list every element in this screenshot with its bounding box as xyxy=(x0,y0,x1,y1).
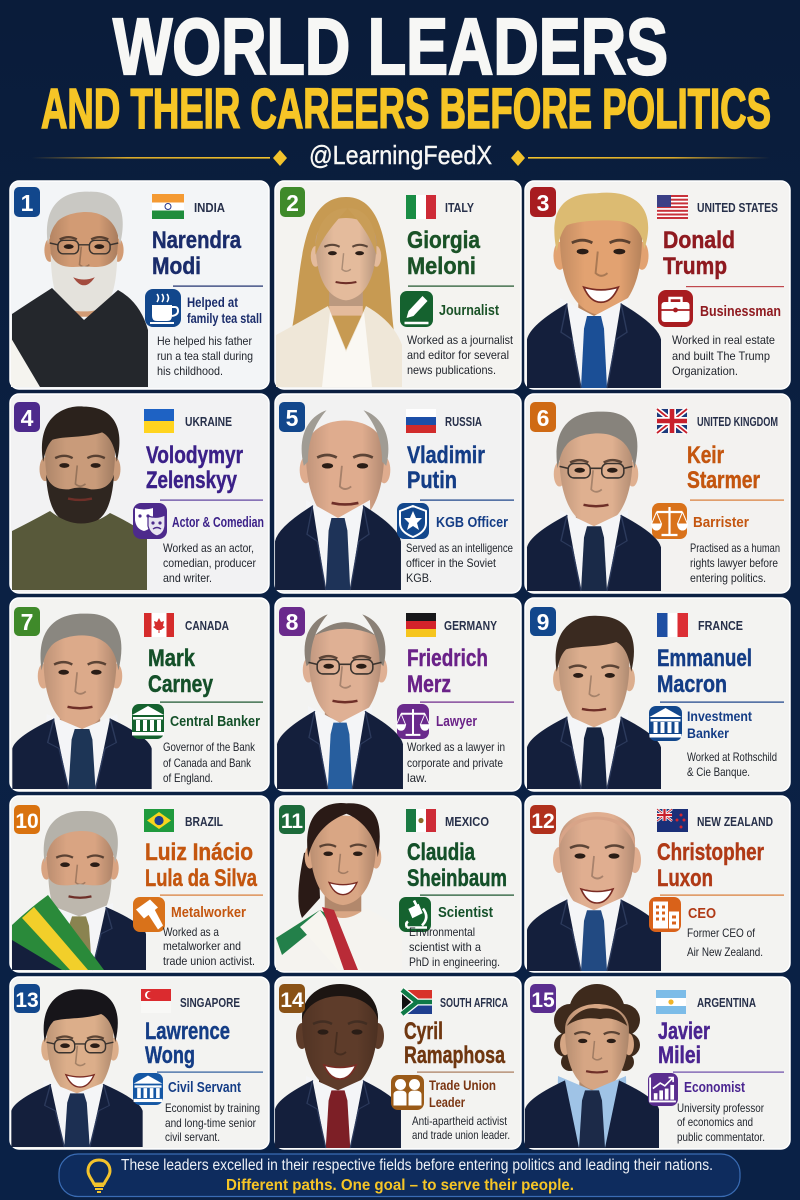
description xyxy=(677,1101,765,1144)
flag: Argentina xyxy=(656,990,686,1014)
description: Worked as a lawyer in xyxy=(407,740,505,754)
panel: 9 Emmanuel Macron xyxy=(525,598,790,791)
number badge xyxy=(14,607,40,636)
icon: chart xyxy=(648,1073,678,1106)
career: Metalworker xyxy=(171,905,246,921)
number badge: 1 xyxy=(21,190,34,216)
number badge xyxy=(14,187,40,217)
description: University professor xyxy=(677,1101,764,1115)
number badge: 10 xyxy=(15,810,39,833)
icon: scales xyxy=(396,704,430,739)
number badge: 11 xyxy=(281,810,303,833)
panel: 10 Luiz Inacio Lula da Silva xyxy=(10,796,269,972)
country: ARGENTINA xyxy=(697,996,756,1010)
name: Mark xyxy=(148,645,195,672)
country: RUSSIA xyxy=(445,415,482,429)
number badge: 2 xyxy=(286,190,299,216)
description: KGB. xyxy=(406,571,432,585)
flag: Ukraine xyxy=(144,409,174,433)
panel: 15 Javier Milei xyxy=(525,977,790,1149)
description: Economist by training xyxy=(165,1101,260,1115)
name: Lula da Silva xyxy=(145,865,257,892)
career: KGB Officer xyxy=(436,515,508,531)
panel: 5 Vladimir Putin xyxy=(275,394,521,593)
country: SOUTH AFRICA xyxy=(440,996,508,1010)
number badge xyxy=(279,607,305,636)
description: law. xyxy=(407,771,427,785)
icon: tea cup xyxy=(145,289,181,327)
number badge: 5 xyxy=(286,405,299,431)
portrait xyxy=(12,406,147,590)
name: Keir xyxy=(687,442,724,469)
panel: 4 Volodymyr Zelenskyy xyxy=(10,394,269,593)
description: Air New Zealand. xyxy=(687,945,763,959)
description: officer in the Soviet xyxy=(406,556,497,570)
country: INDIA xyxy=(194,201,225,215)
name: Wong xyxy=(145,1042,195,1069)
flag: Germany xyxy=(406,613,436,637)
description xyxy=(687,750,777,779)
description: Worked as a journalist xyxy=(407,333,514,347)
name: Sheinbaum xyxy=(407,865,507,892)
description: of England. xyxy=(163,771,213,785)
portrait xyxy=(276,197,402,387)
name: Christopher xyxy=(657,839,764,866)
number badge xyxy=(14,402,40,432)
name: Volodymyr xyxy=(146,442,243,469)
name xyxy=(663,227,735,280)
name xyxy=(658,1018,710,1069)
flag: United States xyxy=(657,195,688,219)
number badge: 15 xyxy=(531,989,555,1012)
icon: pen xyxy=(400,291,433,327)
name: Narendra xyxy=(152,227,241,254)
panel: 6 Keir Starmer xyxy=(525,394,790,593)
description: Anti-apartheid activist xyxy=(412,1114,508,1128)
name: Friedrich xyxy=(407,645,488,672)
number badge xyxy=(530,607,556,636)
portrait xyxy=(12,811,146,970)
number badge xyxy=(280,187,305,217)
footer banner xyxy=(59,1154,740,1196)
description: rights lawyer before xyxy=(690,556,778,570)
portrait xyxy=(525,984,659,1148)
name xyxy=(404,1018,505,1069)
name: Merz xyxy=(407,671,451,698)
number badge: 7 xyxy=(21,609,33,635)
name: Cyril xyxy=(404,1018,443,1045)
number badge: 3 xyxy=(537,190,549,216)
handle row xyxy=(32,140,770,170)
flag: India xyxy=(152,194,184,219)
icon: light bulb xyxy=(88,1160,110,1192)
portrait xyxy=(11,989,143,1147)
name xyxy=(407,839,507,892)
number badge: 9 xyxy=(537,609,549,635)
description: and built The Trump xyxy=(672,349,770,363)
country: UNITED STATES xyxy=(697,201,778,215)
description: metalworker and xyxy=(163,939,241,953)
description xyxy=(672,333,775,378)
number badge: 12 xyxy=(531,810,555,833)
description: corporate and private xyxy=(407,756,503,770)
description: trade union activist. xyxy=(163,954,255,968)
career: Scientist xyxy=(438,905,493,921)
footer text: These leaders excelled in their respective fields before entering politics and leading their nations. xyxy=(121,1157,713,1174)
panel: 1 Narendra Modi xyxy=(10,181,269,389)
career xyxy=(429,1077,496,1110)
country: FRANCE xyxy=(698,619,743,633)
number badge: 13 xyxy=(15,989,39,1012)
career: family tea stall xyxy=(187,310,262,326)
icon: theatre masks xyxy=(133,503,167,539)
panel: 2 Giorgia Meloni xyxy=(275,181,521,389)
name: Trump xyxy=(663,253,727,280)
description: Worked at Rothschild xyxy=(687,750,777,764)
description: Worked in real estate xyxy=(672,333,775,347)
description: of Canada and Bank xyxy=(163,756,252,770)
name: Vladimir xyxy=(407,442,485,469)
description: his childhood. xyxy=(157,364,223,378)
country: UKRAINE xyxy=(185,415,232,429)
portrait xyxy=(277,614,403,789)
career xyxy=(687,708,752,741)
number badge xyxy=(279,805,305,834)
number badge: 6 xyxy=(537,405,549,431)
name xyxy=(148,645,213,698)
career: Businessman xyxy=(700,304,781,320)
career: Banker xyxy=(687,725,729,741)
career: Central Banker xyxy=(170,714,260,730)
panel: 7 Mark Carney xyxy=(10,598,269,791)
description: public commentator. xyxy=(677,1130,765,1144)
icon: briefcase xyxy=(658,290,693,327)
career xyxy=(187,294,262,326)
flag: France xyxy=(657,613,688,637)
description xyxy=(687,926,763,959)
number badge xyxy=(530,187,556,217)
description xyxy=(163,740,256,785)
description: & Cie Banque. xyxy=(687,765,750,779)
number badge: 8 xyxy=(286,609,299,635)
career: Journalist xyxy=(439,303,499,319)
description: of economics and xyxy=(677,1115,753,1129)
name xyxy=(407,442,485,494)
career: Economist xyxy=(684,1080,745,1096)
description: Former CEO of xyxy=(687,926,756,940)
flag: New Zealand xyxy=(657,809,688,832)
description: Environmental xyxy=(409,925,475,939)
name: Meloni xyxy=(407,253,476,280)
name: Javier xyxy=(658,1018,710,1045)
name: Starmer xyxy=(687,467,760,494)
portrait xyxy=(275,410,401,590)
description: and editor for several xyxy=(407,348,509,362)
name: Ramaphosa xyxy=(404,1042,505,1069)
description xyxy=(157,334,253,378)
description: PhD in engineering. xyxy=(409,955,500,969)
flag: United Kingdom xyxy=(657,409,687,433)
flag: Mexico xyxy=(406,809,436,832)
description: news publications. xyxy=(407,363,496,377)
description xyxy=(165,1101,260,1144)
number badge xyxy=(279,402,305,432)
description: Worked as a xyxy=(163,925,219,939)
portrait xyxy=(527,616,661,789)
flag: Canada xyxy=(144,613,174,637)
name: Putin xyxy=(407,467,457,494)
panel: 11 Claudia Sheinbaum xyxy=(275,796,521,972)
description xyxy=(407,740,505,785)
description xyxy=(412,1114,510,1142)
description: scientist with a xyxy=(409,940,481,954)
portrait xyxy=(276,803,402,970)
description: and trade union leader. xyxy=(412,1128,510,1142)
description: Served as an intelligence xyxy=(406,541,513,555)
panel: 14 Cyril Ramaphosa xyxy=(275,977,521,1149)
description: run a tea stall during xyxy=(157,349,253,363)
name xyxy=(152,227,241,280)
description: comedian, producer xyxy=(163,556,256,570)
panel: 12 Christopher Luxon xyxy=(525,796,790,972)
portrait xyxy=(527,412,661,591)
description: Governor of the Bank xyxy=(163,740,256,754)
name xyxy=(145,1018,230,1069)
career: Civil Servant xyxy=(168,1080,241,1096)
flag: Italy xyxy=(406,195,436,219)
icon: building xyxy=(649,897,681,932)
portrait xyxy=(275,984,401,1148)
name xyxy=(407,645,488,698)
name xyxy=(145,839,257,892)
name: Luxon xyxy=(657,865,713,892)
country: SINGAPORE xyxy=(180,996,240,1010)
portrait xyxy=(11,192,148,387)
name: Macron xyxy=(657,671,727,698)
portrait xyxy=(12,614,152,789)
description: He helped his father xyxy=(157,334,252,348)
number badge xyxy=(530,402,556,432)
name: Milei xyxy=(658,1042,701,1069)
icon: shield xyxy=(397,503,429,539)
flag: Singapore xyxy=(141,989,171,1013)
icon: people xyxy=(391,1075,424,1110)
name: Modi xyxy=(152,253,201,280)
flag: Russia xyxy=(406,409,436,433)
name: Claudia xyxy=(407,839,475,866)
description: and writer. xyxy=(163,571,212,585)
name: Giorgia xyxy=(407,227,480,254)
description xyxy=(163,925,255,968)
description: and long-time senior xyxy=(165,1116,256,1130)
name: Carney xyxy=(148,671,213,698)
career: Barrister xyxy=(693,515,749,531)
country: NEW ZEALAND xyxy=(697,815,773,829)
name xyxy=(687,442,760,494)
handle: @LearningFeedX xyxy=(309,140,492,170)
portrait xyxy=(527,812,661,971)
name xyxy=(657,839,764,892)
icon: bank xyxy=(649,706,682,741)
name xyxy=(657,645,752,698)
country: ITALY xyxy=(445,201,475,215)
description: civil servant. xyxy=(165,1130,220,1144)
career: Investment xyxy=(687,708,752,724)
icon: hammer xyxy=(133,897,165,932)
portrait xyxy=(527,193,661,388)
footer tagline: Different paths. One goal – to serve their people. xyxy=(226,1177,574,1194)
panel: 13 Lawrence Wong xyxy=(10,977,269,1149)
career: Leader xyxy=(429,1094,465,1110)
career: Helped at xyxy=(187,294,238,310)
country: MEXICO xyxy=(445,815,489,829)
country: BRAZIL xyxy=(185,815,223,829)
name: Lawrence xyxy=(145,1018,230,1045)
description xyxy=(409,925,500,969)
name: Luiz Inácio xyxy=(145,839,253,866)
name: Emmanuel xyxy=(657,645,752,672)
name: Zelenskyy xyxy=(146,467,237,494)
career: Lawyer xyxy=(436,714,477,730)
name xyxy=(407,227,480,280)
description: Organization. xyxy=(672,364,738,378)
name xyxy=(146,442,243,494)
name: Donald xyxy=(663,227,735,254)
description: entering politics. xyxy=(690,571,766,585)
panel: 3 Donald Trump xyxy=(525,181,790,389)
career: Trade Union xyxy=(429,1077,496,1093)
country: GERMANY xyxy=(444,619,498,633)
icon: scales xyxy=(652,503,688,539)
number badge: 4 xyxy=(21,405,34,431)
country: CANADA xyxy=(185,619,229,633)
description: Worked as an actor, xyxy=(163,541,254,555)
number badge: 14 xyxy=(280,989,304,1012)
icon: bank xyxy=(132,704,164,739)
flag: Brazil xyxy=(144,809,174,832)
description xyxy=(406,541,513,585)
career: Actor & Comedian xyxy=(172,515,264,531)
icon: microscope xyxy=(399,897,431,932)
panel: 8 Friedrich Merz xyxy=(275,598,521,791)
flag: South Africa xyxy=(402,990,432,1014)
description xyxy=(163,541,256,585)
title: WORLD LEADERS xyxy=(113,2,668,91)
icon: bank xyxy=(133,1073,163,1105)
description xyxy=(407,333,514,377)
description xyxy=(690,541,780,585)
career: CEO xyxy=(688,906,716,922)
